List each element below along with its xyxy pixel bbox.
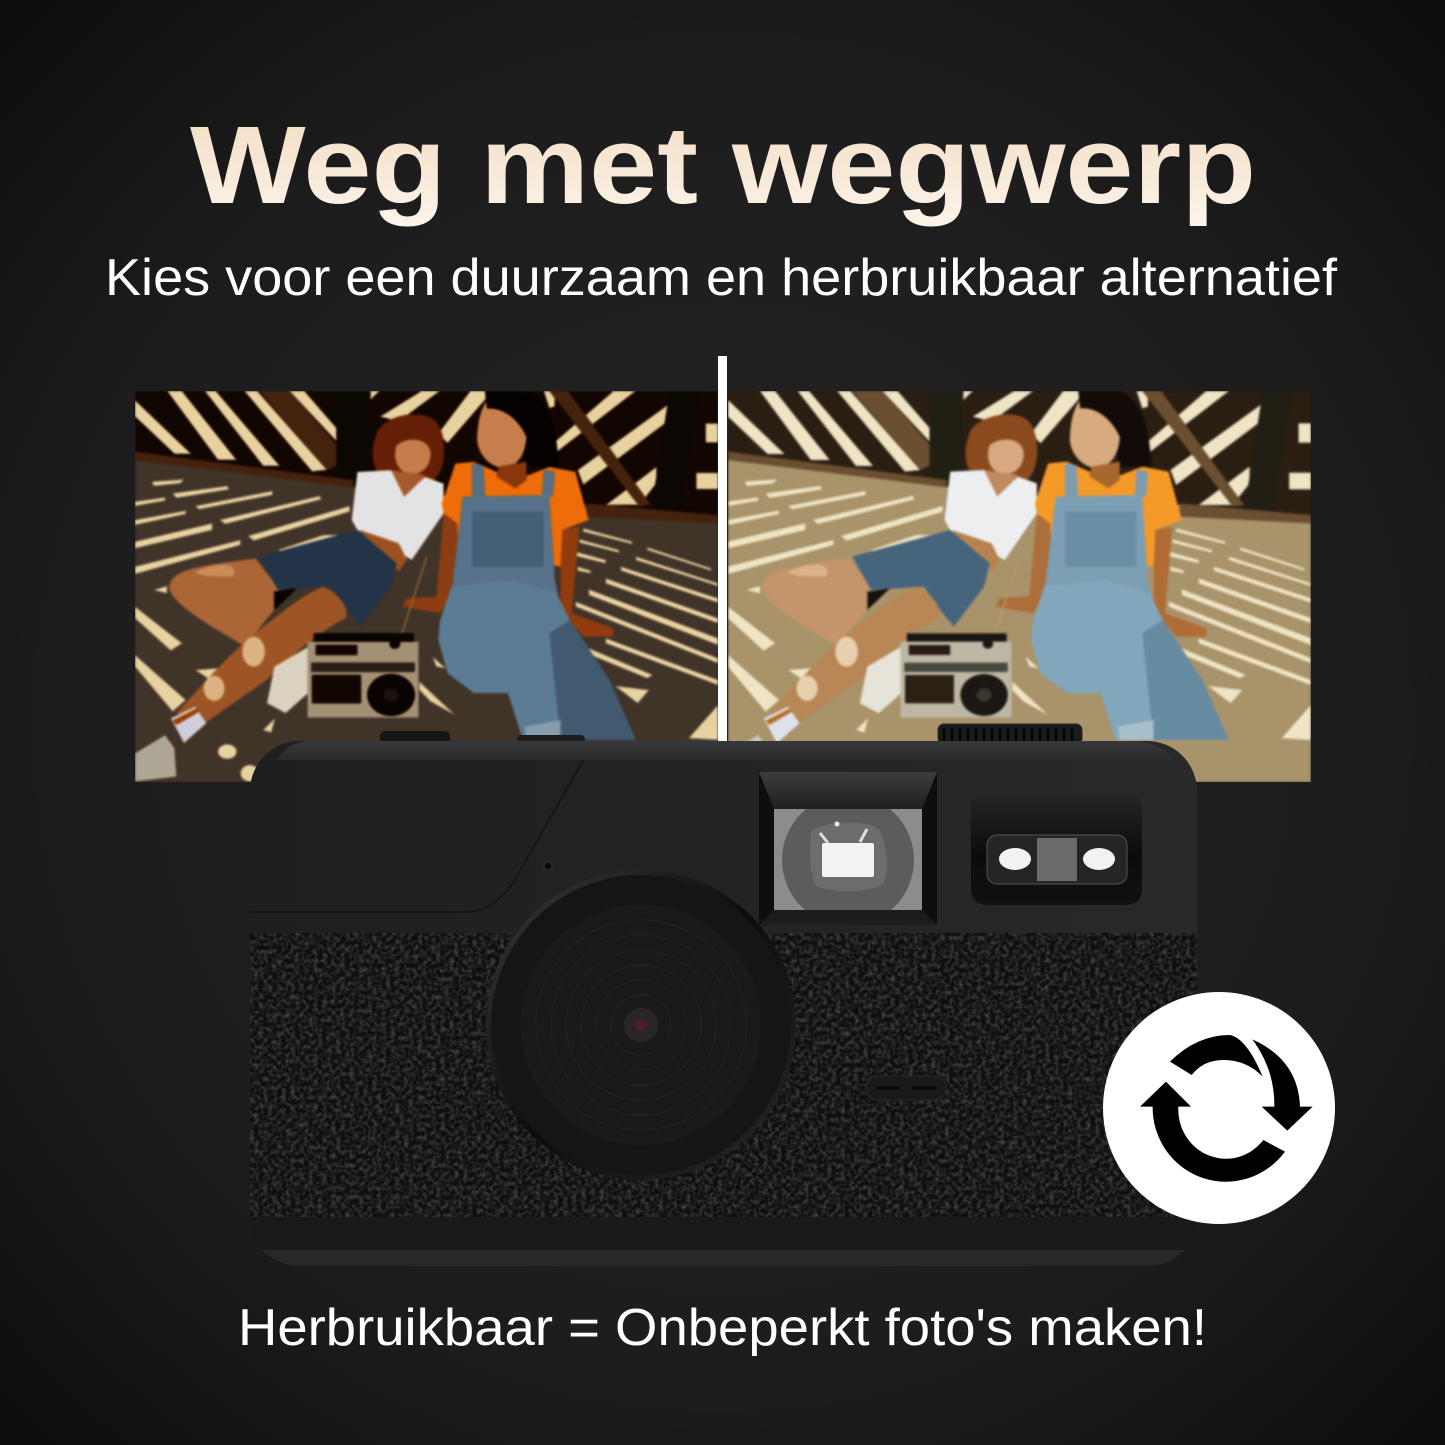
front panel contour bbox=[250, 760, 583, 912]
icon: circular arrows bbox=[1140, 1035, 1313, 1182]
top highlight band bbox=[276, 741, 1173, 760]
bottom caption: Herbruikbaar = Onbeperkt foto's maken! bbox=[238, 1299, 1207, 1357]
recycle badge bbox=[1103, 992, 1335, 1224]
camera bbox=[250, 724, 1197, 1266]
camera top controls bbox=[380, 724, 1082, 744]
speaker grille bbox=[866, 1076, 946, 1100]
lower body band bbox=[250, 1217, 1197, 1266]
photo: after, bright bbox=[728, 391, 1311, 783]
leather panel bbox=[250, 933, 1197, 1217]
flash window bbox=[971, 793, 1142, 905]
sensor hole bbox=[544, 862, 552, 870]
viewfinder bbox=[759, 772, 937, 926]
comparison divider bbox=[718, 356, 727, 746]
title: Weg met wegwerp bbox=[190, 104, 1256, 227]
camera body bbox=[250, 741, 1197, 1266]
photo: before, dark and grainy bbox=[135, 391, 718, 783]
lens bbox=[486, 870, 796, 1180]
subtitle: Kies voor een duurzaam en herbruikbaar alternatief bbox=[105, 249, 1338, 307]
